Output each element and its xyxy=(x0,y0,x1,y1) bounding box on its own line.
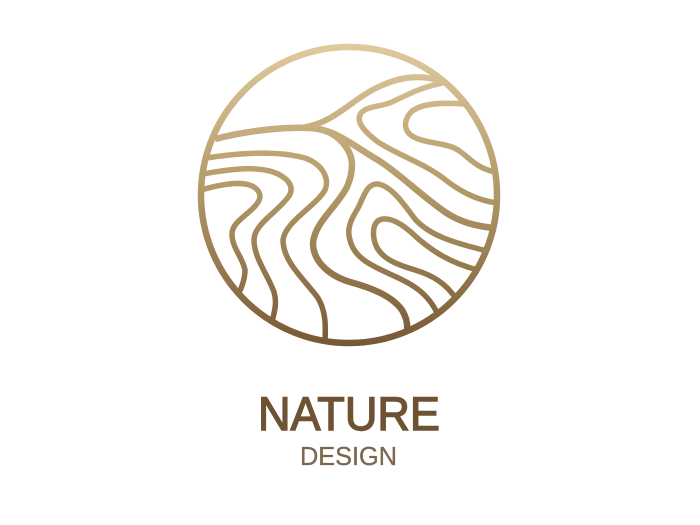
ridge line: upper branch to the right xyxy=(305,77,441,127)
ridge line: main left branch xyxy=(313,129,407,333)
contour loop: lower middle outer xyxy=(349,184,487,315)
contour loop: lower middle inner xyxy=(374,219,478,300)
contour loop: upper right inner xyxy=(406,103,495,172)
emblem outer ring xyxy=(201,47,497,343)
contour line: second from left xyxy=(206,153,326,342)
icon: round landscape emblem xyxy=(201,47,497,343)
wordmark: NATURE: NATURE xyxy=(258,387,440,440)
contour line: fourth from left xyxy=(201,183,260,295)
wordmark: DESIGN: DESIGN xyxy=(300,441,397,471)
ridge line: main diagonal xyxy=(215,128,494,228)
contour line: third from left xyxy=(203,169,291,322)
contour loop: upper right outer xyxy=(359,82,497,203)
